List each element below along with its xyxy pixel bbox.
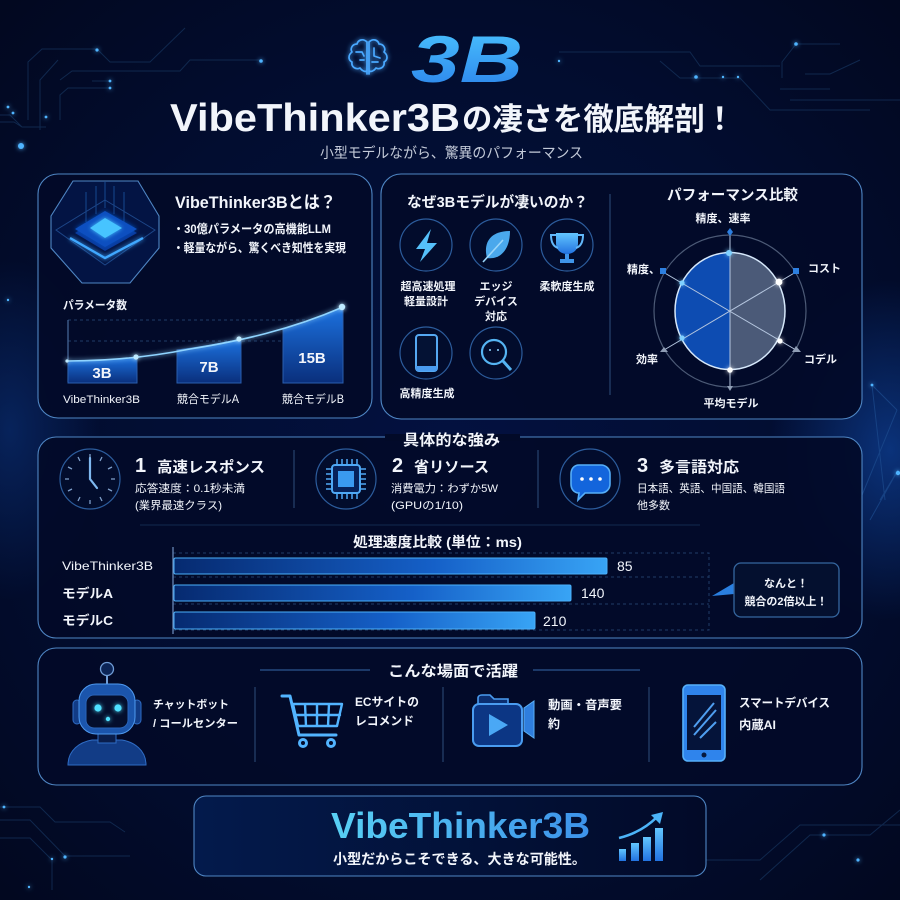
bar chart: processing speed: 85 [617,558,633,574]
heading: VibeThinker3Bとは？ [175,193,336,212]
tagline: 小型だからこそできる、大きな可能性。 [333,851,586,867]
icon: leaf [470,219,522,271]
radar chart: コスト [808,263,841,275]
bullet text: ・軽量ながら、驚くべき知性を実現 [173,240,346,255]
bar chart: parameters: 15B [298,350,326,367]
icon: robot [68,662,146,765]
strength 2: 省リソース [414,458,489,476]
brand name: VibeThinker3B [331,805,590,846]
icon: cart [282,696,342,746]
panel: why and comparison [381,174,862,419]
bar chart: parameters: VibeThinker3B [63,394,140,406]
bar chart: parameters: 競合モデルA [177,392,239,406]
label: 高精度生成 [400,386,454,400]
title: の凄さを徹底解剖！ [462,102,735,137]
label: スマートデバイス [739,695,830,710]
title: VibeThinker3B [170,97,460,140]
icon: chat bubble [560,449,620,509]
subtitle: 小型モデルながら、驚異のパフォーマンス [320,144,583,162]
radar chart: 精度、 [627,262,660,276]
label: 約 [548,716,560,731]
panel: use cases [38,648,862,785]
label: / コールセンター [153,717,238,730]
strength 2: 2 [392,455,403,477]
label: ECサイトの [355,695,419,709]
label [474,280,518,323]
icon: processor [316,449,376,509]
logo: brain icon [349,40,387,74]
chart title: 処理速度比較 (単位：ms) [353,534,522,550]
label: チャットボット [153,698,229,711]
label [355,695,419,728]
bar chart: processing speed: モデルA [62,586,114,601]
panel: concrete strengths [38,431,862,638]
callout: なんと！ [764,577,808,590]
heading: こんな場面で活躍 [388,663,518,680]
bar chart: parameters: 競合モデルB [282,392,344,406]
bar chart: processing speed [62,547,709,634]
radar chart: 精度、速率 [696,211,750,225]
label: 超高速処理 [400,279,456,293]
icon: magnifier [470,327,522,379]
bar chart: processing speed: 140 [581,585,605,601]
label: エッジ [480,280,512,293]
strength 3: 多言語対応 [659,458,739,476]
label [400,279,456,308]
strength 2: (GPUの1/10) [391,500,463,512]
title [170,97,735,140]
icon: phone [400,327,452,379]
label: 動画・音声要 [548,697,622,712]
bar chart: parameters: 3B [92,365,112,382]
label: デバイス [474,294,518,308]
label [153,698,238,730]
radar chart [627,211,841,410]
bar chart: processing speed: モデルC [62,613,114,628]
bullet text: ・30億パラメータの高機能LLM [173,221,331,236]
icon: chip in octagon [51,181,159,283]
strength 1: 応答速度：0.1秒未満 [135,481,245,495]
label: 軽量設計 [404,294,448,308]
icon: clock [60,449,120,509]
radar chart: コデル [804,352,837,366]
bar chart: parameters: 7B [199,359,219,376]
heading: comparison: パフォーマンス比較 [667,187,798,204]
bullet text [173,221,346,255]
radar chart: 効率 [636,352,658,366]
strength 2: 消費電力：わずか5W [391,481,499,495]
bar chart: parameters [63,298,345,406]
bar chart: processing speed: 210 [543,613,567,629]
strength 1 [135,455,265,512]
strength 1: (業界最速クラス) [135,499,222,512]
strength 3 [637,455,785,512]
strength 3: 3 [637,455,648,477]
label [548,697,622,731]
icon: video [473,695,534,746]
bar chart: processing speed: VibeThinker3B [62,559,153,573]
chart label: パラメータ数 [63,298,127,312]
strength 2 [391,455,499,512]
logo: 3B: 3B [411,22,523,96]
icon: growth chart [619,812,663,861]
strength 1: 1 [135,455,146,477]
heading: なぜ3Bモデルが凄いのか？ [407,193,588,211]
panel: closing banner [194,796,706,876]
strength 3: 他多数 [637,498,670,512]
radar chart: 平均モデル [704,396,758,410]
label: 柔軟度生成 [540,279,594,293]
label [739,695,830,732]
label: 内蔵AI [739,717,776,732]
panel: what is VibeThinker3B [38,174,372,418]
icon: smartphone [683,685,725,761]
label: レコメンド [355,714,414,728]
strength 3: 日本語、英語、中国語、韓国語 [637,481,785,495]
icon: trophy [541,219,593,271]
strength 1: 高速レスポンス [157,459,265,476]
callout [712,563,839,617]
callout: 競合の2倍以上！ [744,594,828,608]
heading: 具体的な強み [403,431,500,449]
label: 対応 [485,309,507,323]
icon: lightning [400,219,452,271]
